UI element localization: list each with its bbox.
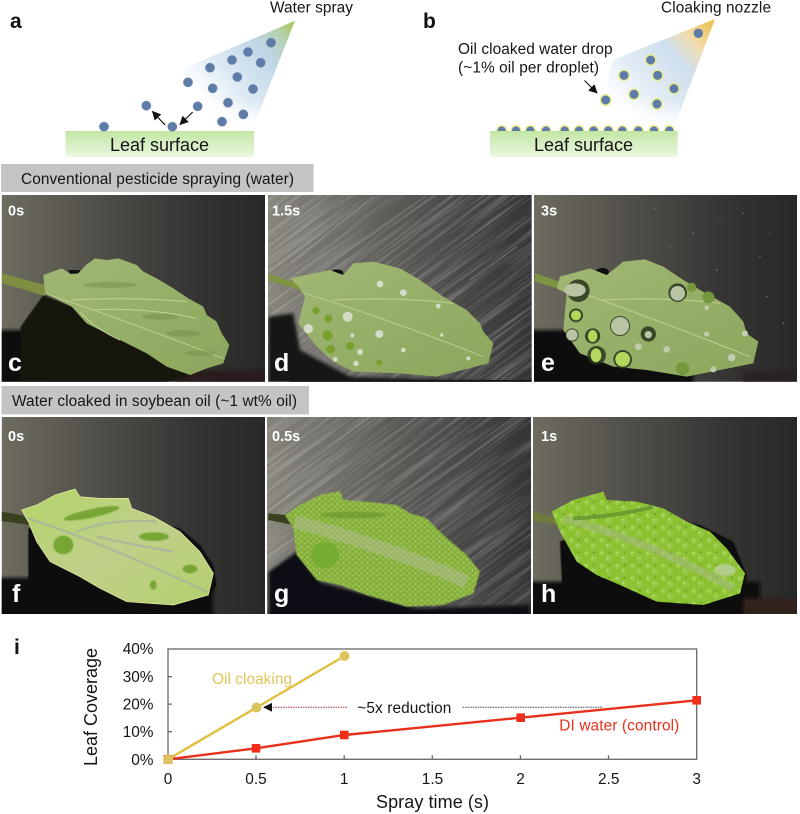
- cloaked droplets: [497, 29, 703, 135]
- photo f: cloaked leaf at 0s: [0, 417, 265, 621]
- panel letter i: i: [14, 636, 20, 659]
- panel letter c: c: [8, 349, 22, 377]
- drop pointer arrow: [584, 80, 597, 93]
- y axis labels: 40%: [123, 641, 154, 658]
- label: 5x reduction: ~5x reduction: [357, 700, 451, 717]
- panel letter b: b: [423, 10, 436, 33]
- label: oil cloaking: Oil cloaking: [212, 671, 292, 688]
- y axis labels: 20%: [123, 696, 154, 714]
- photo d: leaf at 1.5s, water: [268, 195, 532, 382]
- y axis labels: 30%: [123, 669, 154, 686]
- x axis labels: 0.5: [245, 771, 267, 788]
- series: DI water control: [164, 696, 701, 764]
- y axis labels: 10%: [123, 724, 154, 741]
- leaf surface bar: [490, 131, 678, 157]
- bounce arrows: [152, 112, 193, 125]
- spray streaks: [268, 195, 532, 380]
- oil cloaked drop label: (~1% oil per droplet): [458, 60, 599, 77]
- leaf surface label: Leaf surface: [110, 135, 209, 155]
- arrow to oil point: [264, 706, 347, 708]
- leaf surface label: Leaf surface: [534, 135, 633, 155]
- heading bar: soybean oil cloaking: [2, 386, 309, 414]
- heading bar: conventional spraying: Conventional pesticide spraying (water): [21, 171, 294, 188]
- spray cone: [590, 19, 715, 126]
- panel letter a: a: [10, 10, 22, 33]
- series: oil cloaking: [163, 651, 350, 764]
- time label 1.5s: 1.5s: [272, 204, 300, 220]
- x axis labels: 2.5: [598, 771, 619, 788]
- panel a: water spray diagram: [10, 0, 353, 157]
- panel letter h: h: [541, 580, 556, 608]
- spray streaks: [267, 417, 531, 611]
- photo c: leaf at 0s, water: [0, 195, 270, 390]
- water droplets: [99, 38, 276, 131]
- panel b: cloaked spray diagram: [423, 0, 771, 157]
- x axis labels: 2: [516, 771, 525, 788]
- photo e: leaf at 3s, water: [527, 195, 800, 390]
- photo g: cloaked leaf at 0.5s: [267, 417, 531, 614]
- cloaking nozzle label: Cloaking nozzle: [661, 0, 771, 16]
- x axis labels: [164, 771, 701, 788]
- y axis labels: [123, 641, 154, 769]
- x axis labels: 1.5: [422, 771, 443, 788]
- oil cloaked drop label: [458, 41, 612, 77]
- oil cloaked drop label: Oil cloaked water drop: [458, 41, 612, 58]
- photo h: cloaked leaf at 1s: [527, 417, 800, 618]
- spray cone: [165, 21, 295, 126]
- panel letter g: g: [274, 580, 289, 608]
- time label 0.5s: 0.5s: [272, 429, 300, 445]
- panel letter e: e: [541, 349, 555, 377]
- panel letter d: d: [274, 349, 289, 377]
- dotted line to control: [463, 706, 603, 708]
- leaf surface bar: [66, 131, 254, 157]
- y axis title: Leaf Coverage: [81, 648, 101, 766]
- line chart: leaf coverage vs spray time: [81, 641, 701, 812]
- time label 0s: 0s: [8, 429, 24, 445]
- x axis labels: 0: [164, 771, 172, 788]
- heading bar: conventional spraying: [1, 164, 314, 192]
- time label 1s: 1s: [541, 429, 557, 445]
- label: DI water: DI water (control): [559, 718, 679, 735]
- x axis title: Spray time (s): [376, 792, 489, 812]
- heading bar: soybean oil cloaking: Water cloaked in soybean oil (~1 wt% oil): [12, 393, 297, 410]
- x axis labels: 1: [340, 771, 348, 788]
- x axis labels: 3: [692, 771, 701, 788]
- water spray label: Water spray: [270, 0, 353, 16]
- panel letter f: f: [12, 580, 21, 608]
- plot frame with ticks: [168, 649, 697, 759]
- time label 0s: 0s: [8, 204, 24, 220]
- y axis labels: 0%: [131, 752, 154, 769]
- time label 3s: 3s: [541, 204, 557, 220]
